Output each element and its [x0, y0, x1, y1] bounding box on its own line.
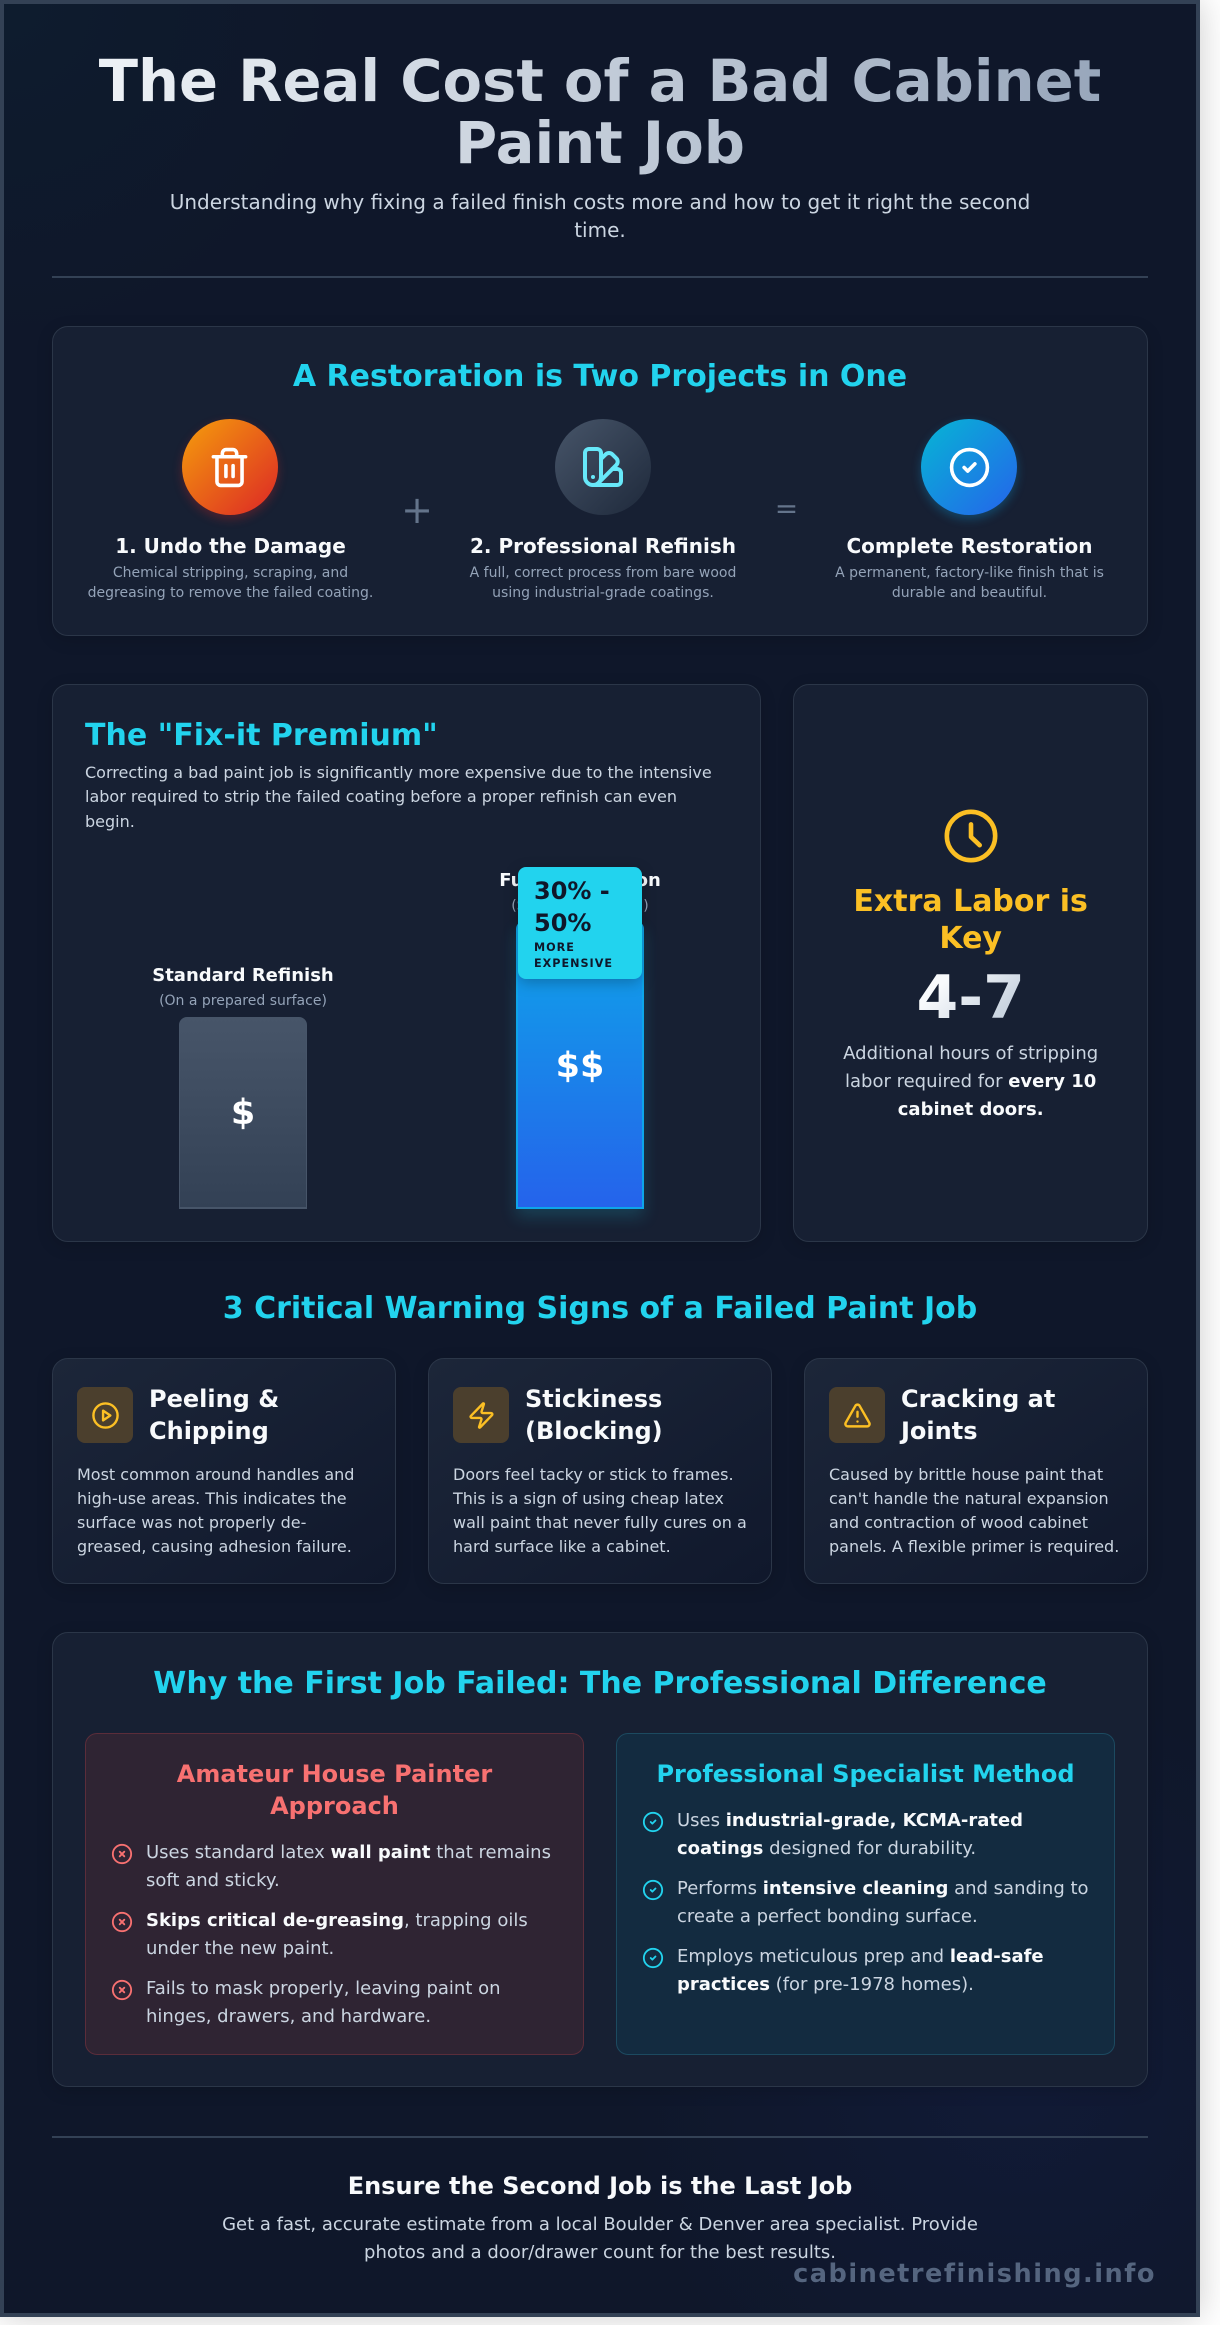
panel: professional method — [616, 1733, 1115, 2055]
bar sublabel: standard: (On a prepared surface) — [159, 993, 327, 1009]
card text: high-use areas. This indicates the — [77, 1489, 347, 1508]
step description — [470, 565, 736, 601]
professional heading: Professional Specialist Method — [656, 1760, 1075, 1788]
stat description — [843, 1043, 1098, 1120]
icon: check circle — [642, 1948, 664, 1968]
bar: full restoration: $$ — [556, 1046, 604, 1086]
card text — [829, 1465, 1119, 1556]
step description — [88, 565, 373, 601]
panel: extra labor — [793, 684, 1148, 1242]
subtitle: Understanding why fixing a failed finish costs more and how to get it right the second — [170, 190, 1030, 214]
list item: Skips critical de-greasing, trapping oils — [146, 1910, 528, 1930]
callout caption: MORE — [534, 940, 575, 954]
card text: Most common around handles and — [77, 1465, 354, 1484]
heading: fix-it premium: The "Fix-it Premium" — [85, 718, 438, 753]
icon: swatch book — [554, 419, 650, 515]
card text: can't handle the natural expansion — [829, 1489, 1109, 1508]
heading: two projects: A Restoration is Two Projects in One — [293, 359, 907, 394]
card text: panels. A flexible primer is required. — [829, 1537, 1119, 1556]
step: complete restoration — [835, 418, 1104, 601]
list item — [677, 1878, 1089, 1926]
icon: circle play — [77, 1387, 133, 1443]
card text: greased, causing adhesion failure. — [77, 1537, 352, 1556]
amateur heading: Approach — [270, 1792, 399, 1820]
list item — [677, 1946, 1044, 1994]
card text: surface was not properly de- — [77, 1513, 306, 1532]
list item: hinges, drawers, and hardware. — [146, 2006, 431, 2026]
card text: and contraction of wood cabinet — [829, 1513, 1088, 1532]
callout: 30% - 50% more expensive — [518, 866, 642, 978]
card text: This is a sign of using cheap latex — [453, 1489, 724, 1508]
icon: x circle — [112, 1912, 132, 1932]
stat description: cabinet doors. — [898, 1099, 1044, 1120]
bar: standard refinish — [179, 1017, 307, 1209]
footer text: Get a fast, accurate estimate from a local Boulder & Denver area specialist. Provide — [222, 2214, 978, 2235]
bar: full restoration — [516, 921, 644, 1209]
list item: under the new paint. — [146, 1938, 334, 1958]
premium description — [85, 763, 712, 831]
callout value — [534, 876, 610, 936]
icon: warning triangle — [829, 1387, 885, 1443]
icon: clock — [944, 810, 998, 862]
card title: Chipping — [149, 1417, 269, 1445]
list item — [146, 1842, 551, 1890]
amateur list — [112, 1842, 551, 2026]
bar sublabel: full restoration: (Stripping required) — [511, 898, 649, 914]
step description: A permanent, factory-like finish that is — [835, 565, 1104, 581]
step description: A full, correct process from bare wood — [470, 565, 736, 581]
amateur heading: Amateur House Painter — [177, 1760, 492, 1788]
step title: 1. Undo the Damage — [115, 534, 346, 558]
stat description: labor required for every 10 — [845, 1071, 1096, 1092]
list item: Fails to mask properly, leaving paint on — [146, 1978, 501, 1998]
card title — [900, 1385, 1055, 1445]
panel: two projects in one — [52, 326, 1148, 636]
step description: Chemical stripping, scraping, and — [113, 565, 348, 581]
premium description: labor required to strip the failed coating before a proper refinish can even — [85, 787, 677, 806]
callout caption: EXPENSIVE — [534, 956, 613, 970]
card title — [149, 1385, 279, 1445]
list item: Performs intensive cleaning and sanding to — [677, 1878, 1089, 1898]
icon: lightning bolt — [453, 1387, 509, 1443]
panel: amateur approach — [85, 1733, 584, 2055]
title: Paint Job — [455, 110, 745, 176]
heading: professional difference: Why the First Job Failed: The Professional Difference — [153, 1666, 1047, 1701]
icon: circle check — [921, 419, 1017, 515]
amateur heading — [176, 1760, 492, 1820]
step: undo the damage — [88, 418, 373, 601]
icon: trash — [182, 419, 278, 515]
plus sign: + — [401, 488, 433, 532]
card text: Caused by brittle house paint that — [829, 1465, 1103, 1484]
step title: Complete Restoration — [846, 534, 1092, 558]
card title: Stickiness — [525, 1385, 662, 1413]
card text: hard surface like a cabinet. — [453, 1537, 671, 1556]
professional list — [642, 1810, 1089, 1994]
subtitle: time. — [574, 218, 626, 242]
card title: Cracking at — [901, 1385, 1055, 1413]
bar label: full restoration: Full Restoration — [499, 870, 661, 891]
subtitle — [170, 190, 1030, 242]
step title: 2. Professional Refinish — [470, 534, 736, 558]
step: professional refinish — [470, 419, 736, 601]
card title: Joints — [901, 1417, 978, 1445]
extra labor heading: Extra Labor is — [853, 884, 1088, 919]
stat: 4-7 — [794, 962, 1147, 1034]
card title — [525, 1385, 663, 1445]
list item — [146, 1978, 501, 2026]
step description: durable and beautiful. — [892, 585, 1047, 601]
footer heading: Ensure the Second Job is the Last Job — [348, 2172, 852, 2200]
list item: practices (for pre-1978 homes). — [677, 1974, 974, 1994]
icon: x circle — [112, 1844, 132, 1864]
footer text: photos and a door/drawer count for the best results. — [364, 2242, 836, 2263]
bar chart — [152, 867, 661, 1222]
callout value: 30% - — [534, 876, 610, 904]
list item: Uses standard latex wall paint that remains — [146, 1842, 551, 1862]
extra labor heading — [853, 884, 1088, 956]
icon: x circle — [112, 1980, 132, 2000]
card text: wall paint that never fully cures on a — [453, 1513, 747, 1532]
callout caption — [534, 940, 613, 970]
icon: check circle — [642, 1880, 664, 1900]
title — [52, 50, 1148, 174]
list item: create a perfect bonding surface. — [677, 1906, 978, 1926]
list item — [677, 1810, 1023, 1858]
list item: soft and sticky. — [146, 1870, 280, 1890]
card: peeling and chipping — [52, 1358, 396, 1584]
premium description: begin. — [85, 812, 135, 831]
list item: Employs meticulous prep and lead-safe — [677, 1946, 1044, 1966]
bar: standard refinish: $ — [231, 1092, 255, 1132]
icon: check circle — [642, 1812, 664, 1832]
card title: Peeling & — [149, 1385, 279, 1413]
panel: fix-it premium — [52, 684, 761, 1242]
card title: (Blocking) — [525, 1417, 663, 1445]
card text — [452, 1465, 747, 1556]
heading: warning signs: 3 Critical Warning Signs of a Failed Paint Job — [223, 1290, 977, 1326]
card: cracking at joints — [804, 1358, 1148, 1584]
step description: using industrial-grade coatings. — [492, 585, 714, 601]
callout value: 50% — [534, 908, 591, 936]
list item: coatings designed for durability. — [677, 1838, 976, 1858]
title: The Real Cost of a Bad Cabinet — [99, 48, 1101, 114]
panel: why the first job failed — [52, 1632, 1148, 2087]
extra labor heading: Key — [939, 921, 1002, 956]
footer text — [222, 2214, 978, 2263]
step description: degreasing to remove the failed coating. — [88, 585, 373, 601]
card text — [77, 1465, 354, 1556]
list item — [146, 1910, 528, 1958]
list item: Uses industrial-grade, KCMA-rated — [677, 1810, 1023, 1830]
watermark: cabinetrefinishing.info — [793, 2259, 1156, 2289]
premium description: Correcting a bad paint job is significantly more expensive due to the intensive — [85, 763, 712, 782]
equals sign: = — [775, 492, 798, 525]
step description — [835, 565, 1104, 601]
card: stickiness — [428, 1358, 772, 1584]
card text: Doors feel tacky or stick to frames. — [453, 1465, 734, 1484]
stat: 4-7: 4-7 — [916, 963, 1025, 1033]
stat description: Additional hours of stripping — [843, 1043, 1098, 1064]
bar label: standard: Standard Refinish — [152, 965, 334, 986]
